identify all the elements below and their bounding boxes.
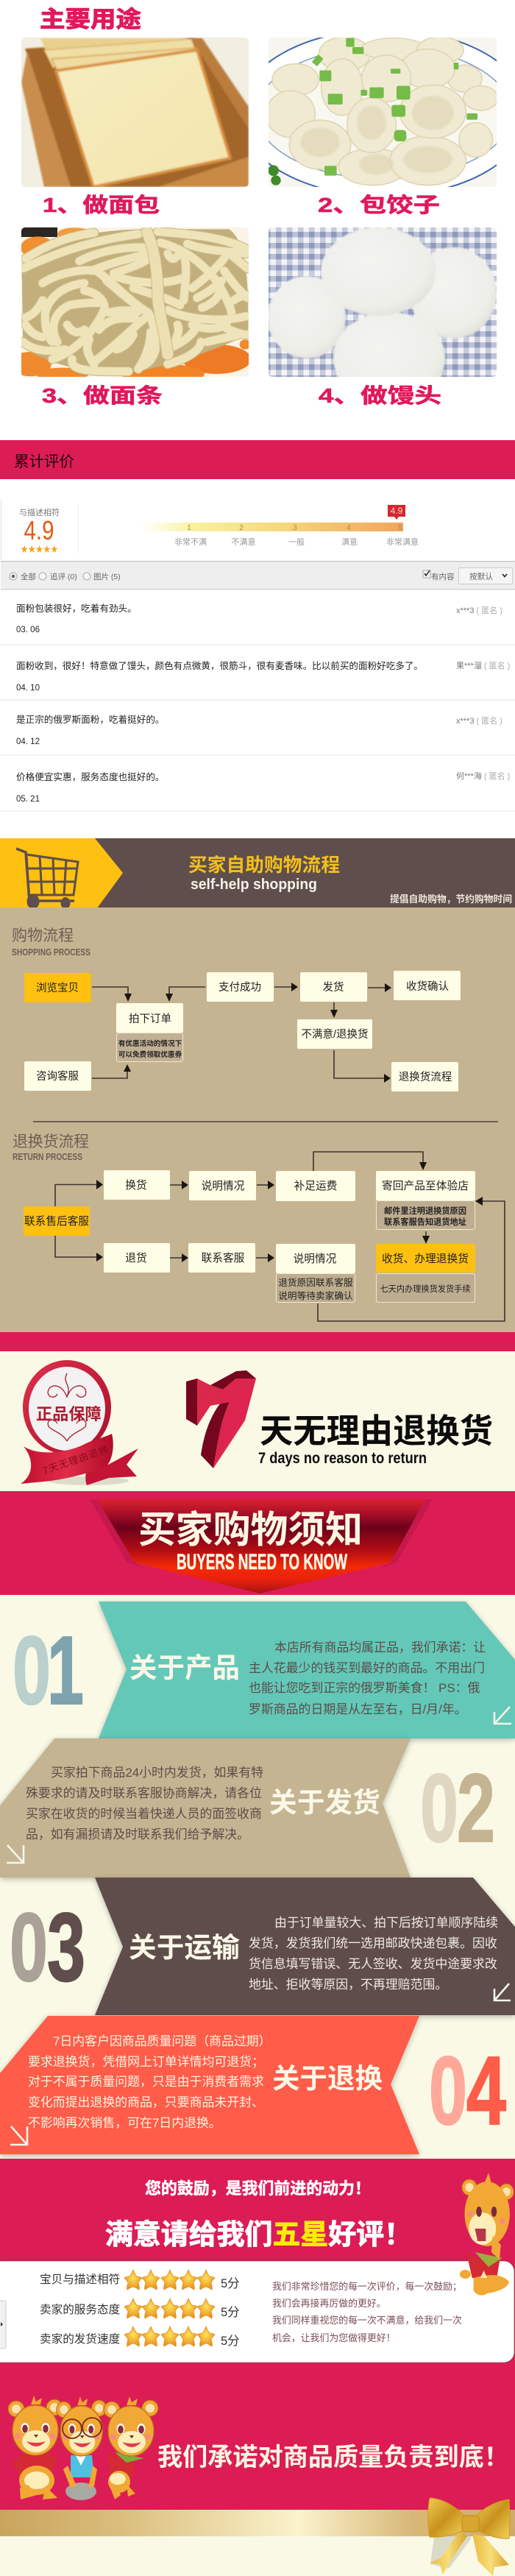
icon: shopping cart <box>16 849 78 909</box>
panel 03: about transport: 发货，发货我们统一选用邮政快递包裹。因收 <box>249 1936 497 1950</box>
panel 04: about returns: 变化而提出退换的商品，只要商品未开封、 <box>28 2095 264 2109</box>
panel 03: about transport: 地址、拒收等原因，不再理赔范围。 <box>249 1978 447 1992</box>
rating summary: 4.9 <box>24 515 54 545</box>
flow chart panel: SHOPPING PROCESS <box>12 947 90 958</box>
ratings card: 宝贝与描述相符 <box>40 2273 120 2286</box>
buyers need to know band: 买家购物须知 <box>138 1509 363 1551</box>
rating scale: 满意 <box>341 537 358 547</box>
rating summary <box>1 500 79 560</box>
bear two <box>57 2396 107 2500</box>
ratings card: 5分 <box>221 2276 240 2290</box>
shopping process boxes: 收货确认 <box>406 980 449 993</box>
badge: genuine guarantee <box>21 1360 138 1485</box>
return process boxes: 说明情况 <box>202 1180 245 1192</box>
review 1: 面粉包装很好，吃着有劲头。 <box>16 603 137 614</box>
icon: gold bow <box>428 2498 510 2576</box>
panel 01: about product: 本店所有商品均属正品，我们承诺：让 <box>274 1641 486 1655</box>
title: main uses: 主要用途 <box>40 7 141 32</box>
panel 02: about shipping: 买家在收货的时候当着快递人员的面签收商 <box>26 1807 262 1821</box>
label: 3 noodles: 3、做面条 <box>42 384 163 407</box>
shopping process boxes: 有优惠活动的情况下 <box>118 1039 182 1048</box>
ratings card: 5分 <box>221 2334 240 2348</box>
panel 01: about product: 主人花最少的钱买到最好的商品。不用出门 <box>249 1661 485 1675</box>
filter bar <box>1 561 515 590</box>
panel 02: about shipping: 殊要求的请及时联系客服协商解决，请各位 <box>26 1786 262 1800</box>
panel 04: about returns: 对于不属于质量问题，只是由于消费者需求 <box>28 2075 264 2089</box>
shopping process boxes: 发货 <box>322 981 344 994</box>
panel 04: about returns: 不影响再次销售，可在7日内退换。 <box>28 2116 221 2130</box>
rating scale: 一般 <box>288 537 305 547</box>
photo: dumplings <box>269 38 497 187</box>
red band <box>0 1332 515 1351</box>
red closing panel <box>0 2159 515 2510</box>
self-help shopping header <box>0 838 515 911</box>
panel 04: about returns: 要求退换货，凭借网上订单详情均可退货； <box>28 2055 264 2069</box>
review 2: 面粉收到，很好！特意做了馒头，颜色有点微黄，很筋斗，很有麦香味。比以前买的面粉好吃多了。 <box>16 660 423 671</box>
panel 02: about shipping: 0 <box>420 1754 458 1862</box>
panel 02: about shipping: 2 <box>457 1754 495 1862</box>
buyers need to know band: BUYERS NEED TO KNOW <box>177 1550 347 1574</box>
panel 02: about shipping <box>0 1738 495 1878</box>
bear three <box>104 2396 158 2499</box>
ratings card: 我们同样重视您的每一次不满意，给我们一次 <box>272 2315 462 2326</box>
review 1: x***3 ( 匿名 ) <box>456 605 502 615</box>
panel 01: about product <box>13 1602 515 1738</box>
panel 03: about transport: 3 <box>47 1893 85 2001</box>
ratings card: 我们非常珍惜您的每一次评价，每一次鼓励； <box>272 2281 462 2293</box>
star rows <box>124 2270 215 2346</box>
7 days headline <box>258 1412 493 1467</box>
review 3 <box>0 714 515 755</box>
ratings card <box>0 2261 514 2363</box>
review 4: 05. 21 <box>16 795 40 804</box>
flow chart panel: RETURN PROCESS <box>13 1152 82 1162</box>
return process boxes: 七天内办理换货发货手续 <box>380 1284 471 1294</box>
rating scale: 非常满意 <box>386 537 419 547</box>
flow chart panel: 购物流程 <box>12 927 74 944</box>
reviews heading band: 累计评价 <box>14 453 74 470</box>
return process boxes: 收货、办理退换货 <box>382 1253 469 1265</box>
return process boxes: 说明等待卖家确认 <box>278 1290 353 1301</box>
panel 04: about returns: 7日内客户因商品质量问题（商品过期） <box>53 2034 271 2048</box>
review 4: 何***海 ( 匿名 ) <box>456 771 510 781</box>
return process boxes: 换货 <box>125 1179 147 1192</box>
mascot: bear waving <box>460 2173 514 2296</box>
return process boxes: 联系客服告知退货地址 <box>384 1217 466 1227</box>
review 2: 04. 10 <box>16 684 40 693</box>
shopping process boxes: 支付成功 <box>219 981 261 994</box>
label: 4 buns: 4、做馒头 <box>319 384 441 407</box>
rating scale: 4 <box>347 524 351 532</box>
panel 02: about shipping: 买家拍下商品24小时内发货，如果有特 <box>51 1766 263 1780</box>
panel 01: about product: 罗斯商品的日期是从左至右，日/月/年。 <box>249 1702 467 1716</box>
self-help shopping header: 买家自助购物流程 <box>188 854 340 876</box>
shopping process boxes <box>24 971 461 1091</box>
shopping process arrows <box>92 983 391 1083</box>
return process boxes: 补足运费 <box>294 1180 337 1192</box>
filter bar: 有内容 <box>431 572 455 581</box>
label: 2 dumplings: 2、包饺子 <box>318 194 440 216</box>
encouragement heading: 您的鼓励，是我们前进的动力！ <box>145 2179 371 2198</box>
shopping process boxes: 拍下订单 <box>129 1013 171 1025</box>
return process boxes: 联系客服 <box>202 1252 245 1264</box>
rating scale: 2 <box>239 524 244 532</box>
return process arrows <box>55 1152 505 1321</box>
ratings card: 机会，让我们为您做得更好！ <box>272 2332 396 2343</box>
review 4 <box>0 771 515 811</box>
panel 03: about transport: 关于运输 <box>129 1932 240 1963</box>
encouragement heading: 满意请给我们五星好评！ <box>105 2220 412 2251</box>
return process boxes: 邮件里注明退换货原因 <box>384 1206 466 1216</box>
shopping process boxes: 可以免费领取优惠券 <box>118 1050 182 1059</box>
panel 01: about product: 也能让您吃到正宗的俄罗斯美食！ PS：俄 <box>249 1681 480 1695</box>
photo: noodles <box>21 227 249 377</box>
review 3: 04. 12 <box>16 737 40 746</box>
panel 04: about returns: 0 <box>429 2037 467 2145</box>
reviews heading band <box>0 440 515 479</box>
panel 01: about product: 1 <box>47 1616 84 1724</box>
panel 03: about transport: 0 <box>10 1893 48 2001</box>
return process boxes: 说明情况 <box>294 1253 337 1265</box>
flow chart panel: 退换货流程 <box>13 1133 89 1150</box>
review 2: 果***溜 ( 匿名 ) <box>456 660 510 670</box>
rating scale: 3 <box>293 524 297 532</box>
rating scale: 4.9 <box>391 506 403 516</box>
panel 04: about returns <box>0 2016 506 2154</box>
badge: genuine guarantee: 7天无理由退换 <box>41 1443 110 1476</box>
review 1 <box>0 603 515 645</box>
self-help shopping header: 提倡自助购物，节约购物时间 <box>390 894 512 905</box>
bear one <box>8 2396 63 2499</box>
review 1: 03. 06 <box>16 626 40 634</box>
shopping process boxes: 浏览宝贝 <box>36 982 79 994</box>
panel 03: about transport: 由于订单量较大、拍下后按订单顺序陆续 <box>274 1916 498 1930</box>
rating scale: 1 <box>187 524 191 532</box>
review 3: 是正宗的俄罗斯面粉，吃着挺好的。 <box>16 714 165 725</box>
return process boxes: 寄回产品至体验店 <box>382 1179 469 1192</box>
return process boxes: 联系售后客服 <box>24 1215 89 1228</box>
label: 1 bread: 1、做面包 <box>43 194 160 216</box>
return process boxes: 退货原因联系客服 <box>278 1277 353 1288</box>
review 4: 价格便宜实惠，服务态度也挺好的。 <box>16 771 165 782</box>
review 3: x***3 ( 匿名 ) <box>456 715 502 726</box>
self-help shopping header: self-help shopping <box>191 877 317 893</box>
shopping process boxes: 不满意/退换货 <box>301 1027 369 1041</box>
big numeral 7 <box>186 1370 256 1468</box>
filter bar: 图片 (5) <box>93 572 121 581</box>
panel 01: about product: 关于产品 <box>129 1652 240 1683</box>
rating summary: ★★★★★ <box>21 545 58 554</box>
ratings card: 5分 <box>221 2305 240 2319</box>
shopping process boxes: 咨询客服 <box>36 1070 79 1083</box>
rating summary: 与描述相符 <box>19 507 60 517</box>
filter bar: 追评 (0) <box>50 572 77 581</box>
panel 04: about returns: 关于退换 <box>272 2063 383 2094</box>
return process boxes <box>24 1170 475 1303</box>
panel 03: about transport <box>10 1878 515 2015</box>
ratings card: 卖家的发货速度 <box>40 2332 120 2346</box>
panel 03: about transport: 货信息填写错误、无人签收、发货中途要求改 <box>249 1957 497 1971</box>
buyers need to know band <box>0 1491 515 1595</box>
mascots: three bears <box>8 2396 158 2500</box>
rating scale: 非常不满 <box>174 537 207 547</box>
rating scale: 不满意 <box>231 537 256 547</box>
badge: genuine guarantee: 正品保障 <box>36 1405 102 1423</box>
review 2 <box>0 660 515 701</box>
rating scale <box>140 505 419 547</box>
panel 02: about shipping: 关于发货 <box>269 1787 380 1818</box>
ratings card: 我们会再接再厉做的更好。 <box>272 2298 386 2309</box>
panel 01: about product: 0 <box>13 1616 51 1724</box>
return process boxes: 退货 <box>125 1252 147 1264</box>
filter bar: 全部 <box>21 572 36 581</box>
photo: bread <box>21 38 249 187</box>
shopping process boxes: 退换货流程 <box>399 1071 452 1083</box>
filter bar: 按默认 <box>469 572 493 581</box>
encouragement heading <box>105 2179 412 2251</box>
gold ribbon band <box>0 2510 515 2536</box>
7 days headline: 7 days no reason to return <box>258 1450 427 1467</box>
panel 02: about shipping: 品，如有漏损请及时联系我们给予解决。 <box>26 1827 249 1841</box>
ratings card: 卖家的服务态度 <box>40 2303 120 2316</box>
rating scale: 5 <box>398 524 402 532</box>
flow chart panel <box>0 907 515 1332</box>
photo: steamed buns <box>269 227 497 377</box>
7 days headline: 天无理由退换货 <box>260 1412 493 1450</box>
slogan: 我们承诺对商品质量负责到底！ <box>157 2444 509 2471</box>
